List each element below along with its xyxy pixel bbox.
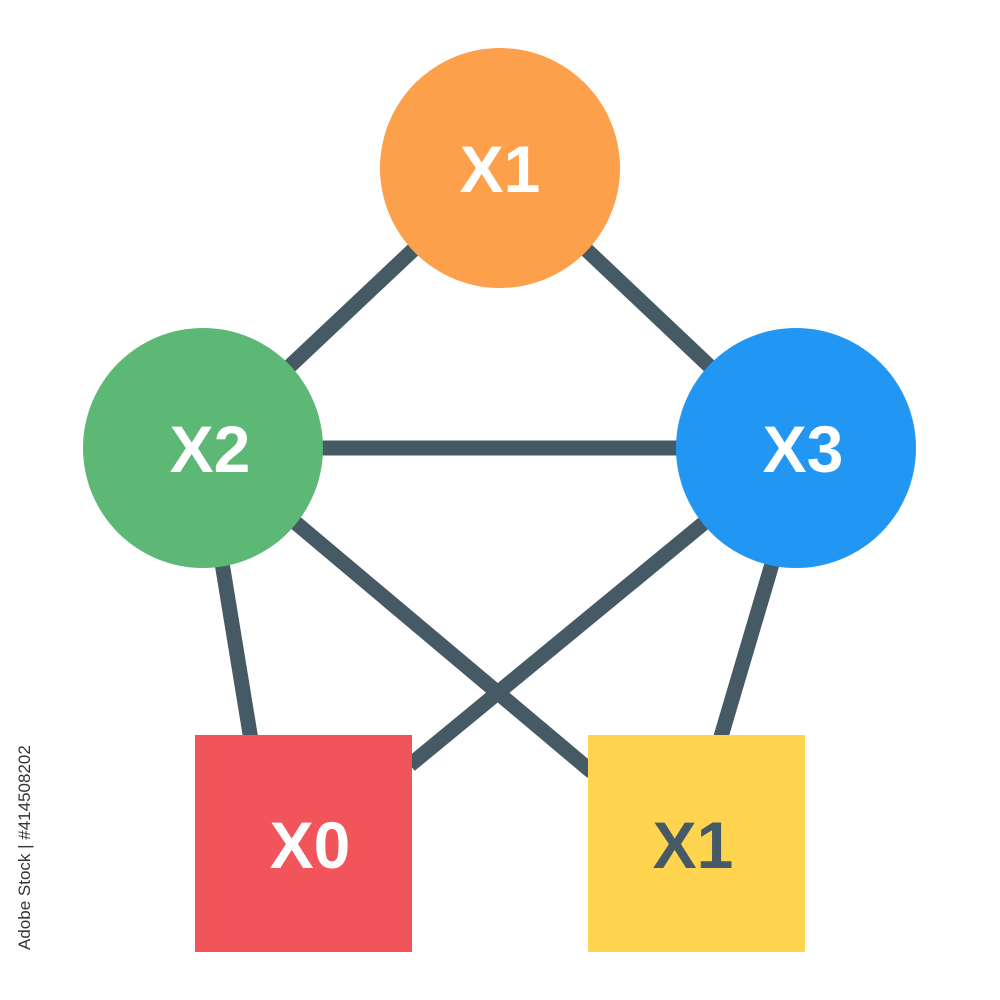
node: X3 circle: [676, 328, 916, 568]
node: X2 circle: [83, 328, 323, 568]
node: X1 yellow square: X1: [653, 808, 733, 882]
watermark text: Adobe Stock | #414508202: [15, 745, 34, 950]
node: X0 square: X0: [270, 808, 350, 882]
connecting lines: [203, 168, 796, 772]
node: X1 top circle: [380, 48, 620, 288]
node: X1 yellow square: [588, 735, 805, 952]
node: X2 circle: X2: [170, 412, 250, 486]
node: X0 square: [195, 735, 412, 952]
node: X1 top circle: X1: [460, 132, 540, 206]
node: X3 circle: X3: [763, 412, 843, 486]
